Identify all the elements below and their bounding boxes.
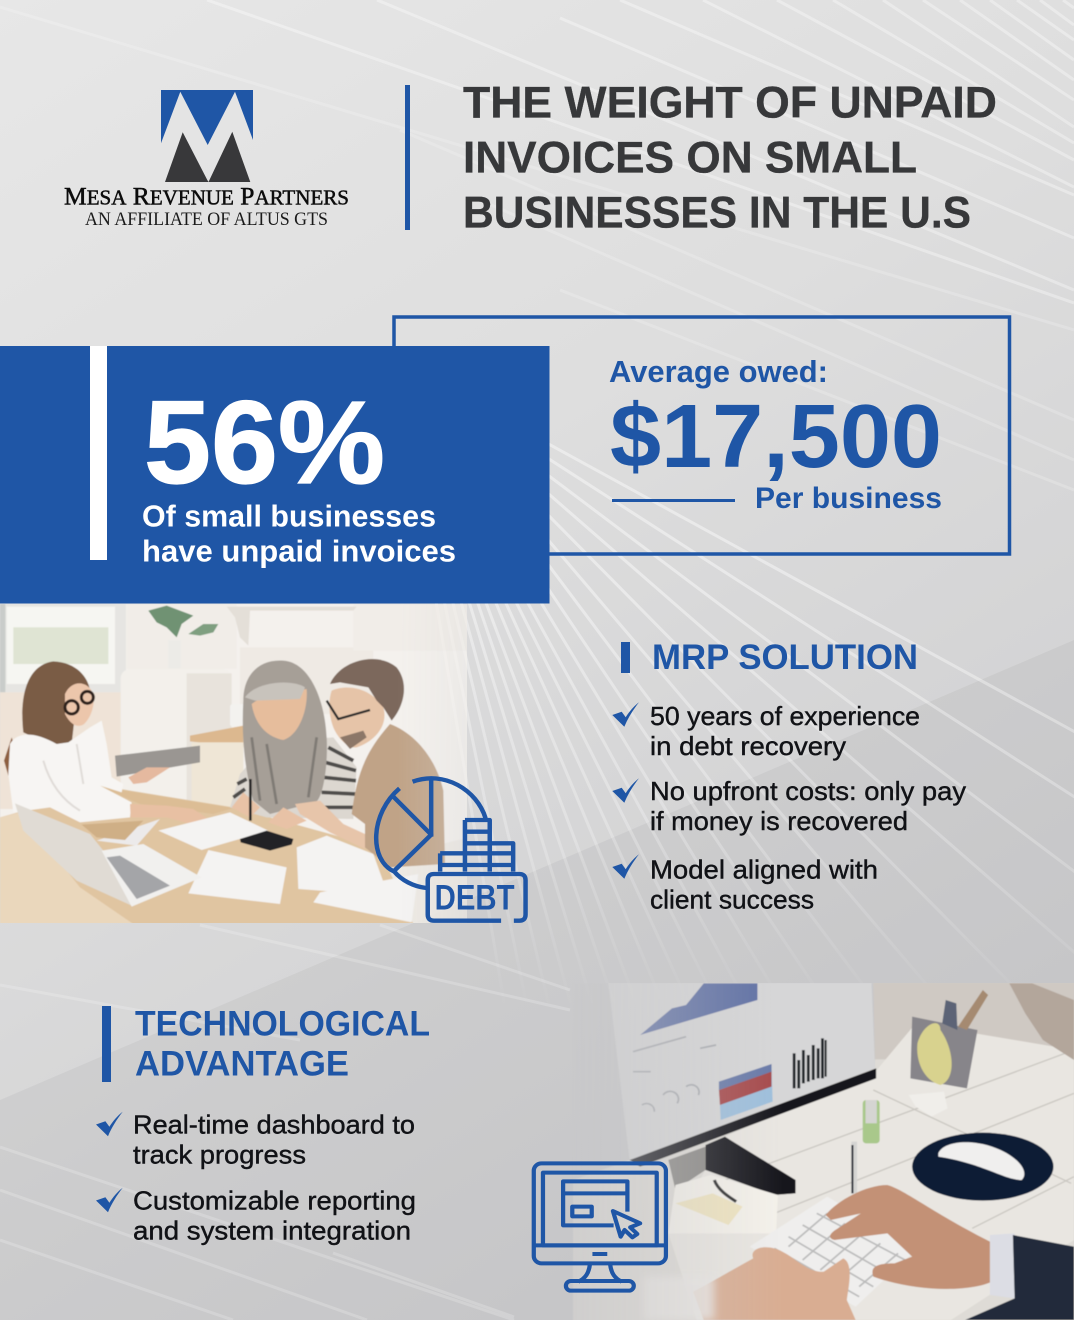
title: THE WEIGHT OF UNPAID bbox=[463, 78, 997, 128]
average owed label: Average owed: bbox=[609, 354, 828, 389]
monitor bbox=[573, 983, 875, 1180]
icon: computer monitor with cursor bbox=[534, 1163, 666, 1291]
56 percent value: 56% bbox=[144, 377, 385, 509]
man in tan sweater bbox=[295, 659, 445, 867]
average owed value: $17,500 bbox=[610, 387, 942, 487]
bullet: reporting: and system integration bbox=[133, 1216, 411, 1246]
heading: technological advantage: TECHNOLOGICAL bbox=[135, 1004, 430, 1044]
bullet: dashboard: track progress bbox=[133, 1140, 306, 1170]
advisor bbox=[4, 661, 213, 826]
bullet: aligned model: client success bbox=[650, 884, 814, 914]
bullet: aligned model: Model aligned with bbox=[650, 854, 878, 884]
56 percent description: Of small businesses bbox=[142, 498, 436, 534]
per business rule and label: Per business bbox=[755, 482, 942, 515]
bullet: reporting bbox=[96, 1186, 416, 1246]
title bbox=[463, 78, 997, 238]
logo mark: dark peaks bbox=[165, 132, 250, 182]
bullet: experience bbox=[612, 701, 920, 761]
bullet: experience: 50 years of experience bbox=[650, 701, 920, 731]
title: BUSINESSES IN THE U.S bbox=[463, 188, 971, 238]
bullet: experience: in debt recovery bbox=[650, 731, 846, 761]
pencil cup bbox=[910, 1017, 978, 1088]
bullet: no upfront costs: No upfront costs: only pay bbox=[650, 776, 966, 806]
bullet: no upfront costs bbox=[612, 776, 966, 836]
panel: 56 percent bbox=[0, 346, 550, 604]
photo: advisor with couple reviewing papers bbox=[0, 604, 470, 924]
heading accent bar bbox=[102, 1006, 111, 1082]
bullet: dashboard bbox=[96, 1110, 415, 1170]
title: INVOICES ON SMALL bbox=[463, 134, 917, 182]
heading accent bar bbox=[621, 642, 630, 673]
icon: debt pie chart and coins bbox=[376, 778, 526, 921]
logo bbox=[64, 90, 349, 230]
panel: MRP solution bbox=[612, 638, 966, 914]
heading: technological advantage bbox=[135, 1004, 430, 1084]
mouse pad and mouse bbox=[912, 1133, 1053, 1201]
heading: MRP solution: MRP SOLUTION bbox=[652, 638, 918, 677]
bullet: dashboard: Real-time dashboard to bbox=[133, 1110, 415, 1140]
photo: hands typing at desk with dashboard monitor bbox=[573, 983, 1074, 1320]
shirt cuff and sleeve bbox=[990, 1233, 1015, 1298]
heading: technological advantage: ADVANTAGE bbox=[135, 1044, 349, 1084]
keyboard bbox=[750, 1197, 916, 1307]
notepad bbox=[668, 1175, 778, 1233]
icon label: debt: DEBT bbox=[435, 878, 515, 917]
logo tagline: AN AFFILIATE OF ALTUS GTS bbox=[85, 210, 328, 230]
panel: technological advantage bbox=[96, 1004, 430, 1246]
logo name: MESA REVENUE PARTNERS bbox=[64, 182, 349, 210]
woman with grey hair bbox=[230, 661, 357, 829]
56 percent description: have unpaid invoices bbox=[142, 534, 456, 568]
per business rule and label bbox=[612, 482, 942, 515]
bullet: reporting: Customizable reporting bbox=[133, 1186, 416, 1216]
hands bbox=[826, 1185, 995, 1289]
logo mark: blue peaks bbox=[161, 90, 253, 145]
header divider bbox=[405, 85, 410, 230]
panel: average owed bbox=[394, 317, 1010, 554]
table papers bbox=[158, 812, 418, 922]
bullet: aligned model bbox=[612, 854, 878, 914]
56 percent description bbox=[142, 498, 456, 568]
laptop bbox=[15, 803, 132, 906]
white accent bar bbox=[90, 346, 107, 560]
bullet: no upfront costs: if money is recovered bbox=[650, 806, 908, 836]
